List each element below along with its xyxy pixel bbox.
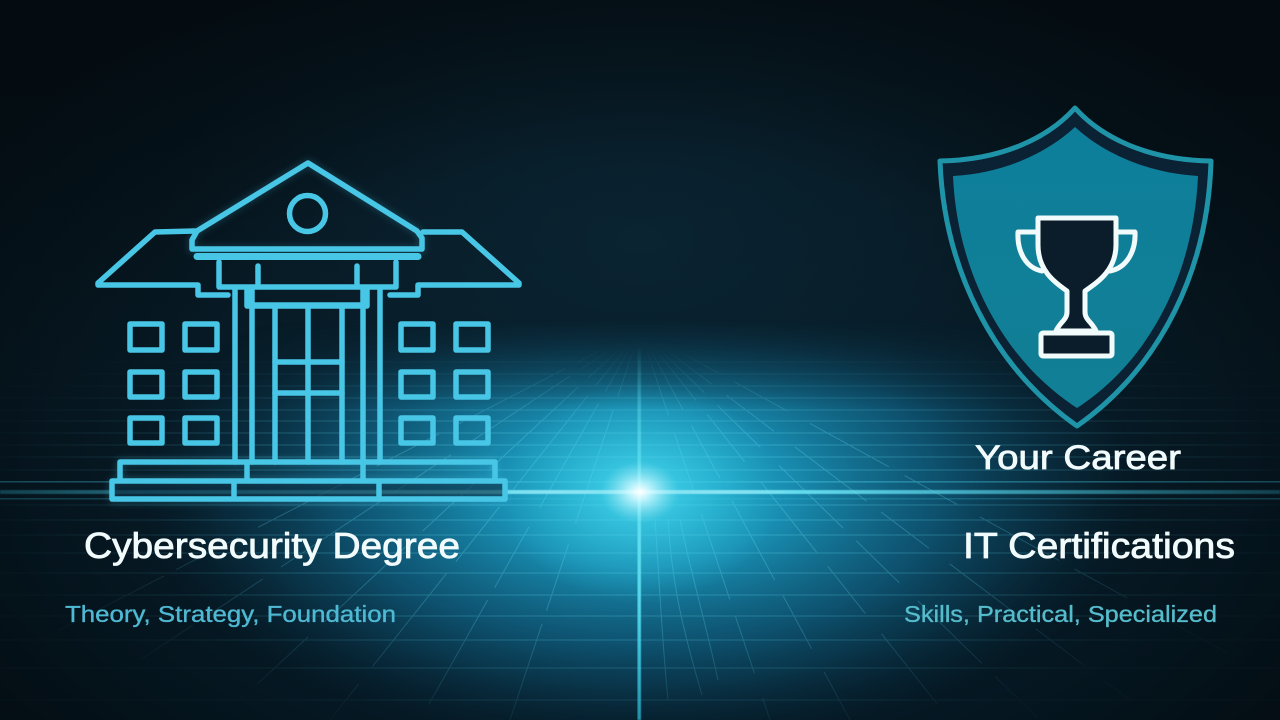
shield inner fill <box>953 127 1198 408</box>
subtext: certification attributes: Skills, Practical, Specialized <box>904 601 1217 627</box>
left roof <box>98 231 228 295</box>
perspective circuit grid <box>13 362 1267 720</box>
trophy base <box>1041 333 1112 356</box>
columns and door <box>235 288 380 462</box>
shield outer rim <box>940 108 1211 426</box>
trophy cup and stem <box>1038 218 1116 331</box>
steps <box>112 462 505 499</box>
label: your career: Your Career <box>975 439 1181 477</box>
heading: it certifications: IT Certifications <box>963 525 1235 566</box>
icon: university building <box>98 163 519 500</box>
icon: shield with trophy <box>940 108 1211 426</box>
building glow <box>112 163 505 500</box>
windows left <box>130 324 217 443</box>
central glow <box>500 382 780 602</box>
trophy <box>1018 218 1135 356</box>
horizontal light flare <box>0 481 1280 500</box>
windows right <box>401 324 488 443</box>
pediment with round window <box>192 163 422 256</box>
entablature <box>219 262 396 306</box>
heading: cybersecurity degree: Cybersecurity Degree <box>84 525 460 566</box>
subtext: degree attributes: Theory, Strategy, Foundation <box>65 601 396 627</box>
vertical light flare <box>638 345 641 720</box>
right roof <box>390 232 519 295</box>
trophy handles <box>1018 232 1135 271</box>
